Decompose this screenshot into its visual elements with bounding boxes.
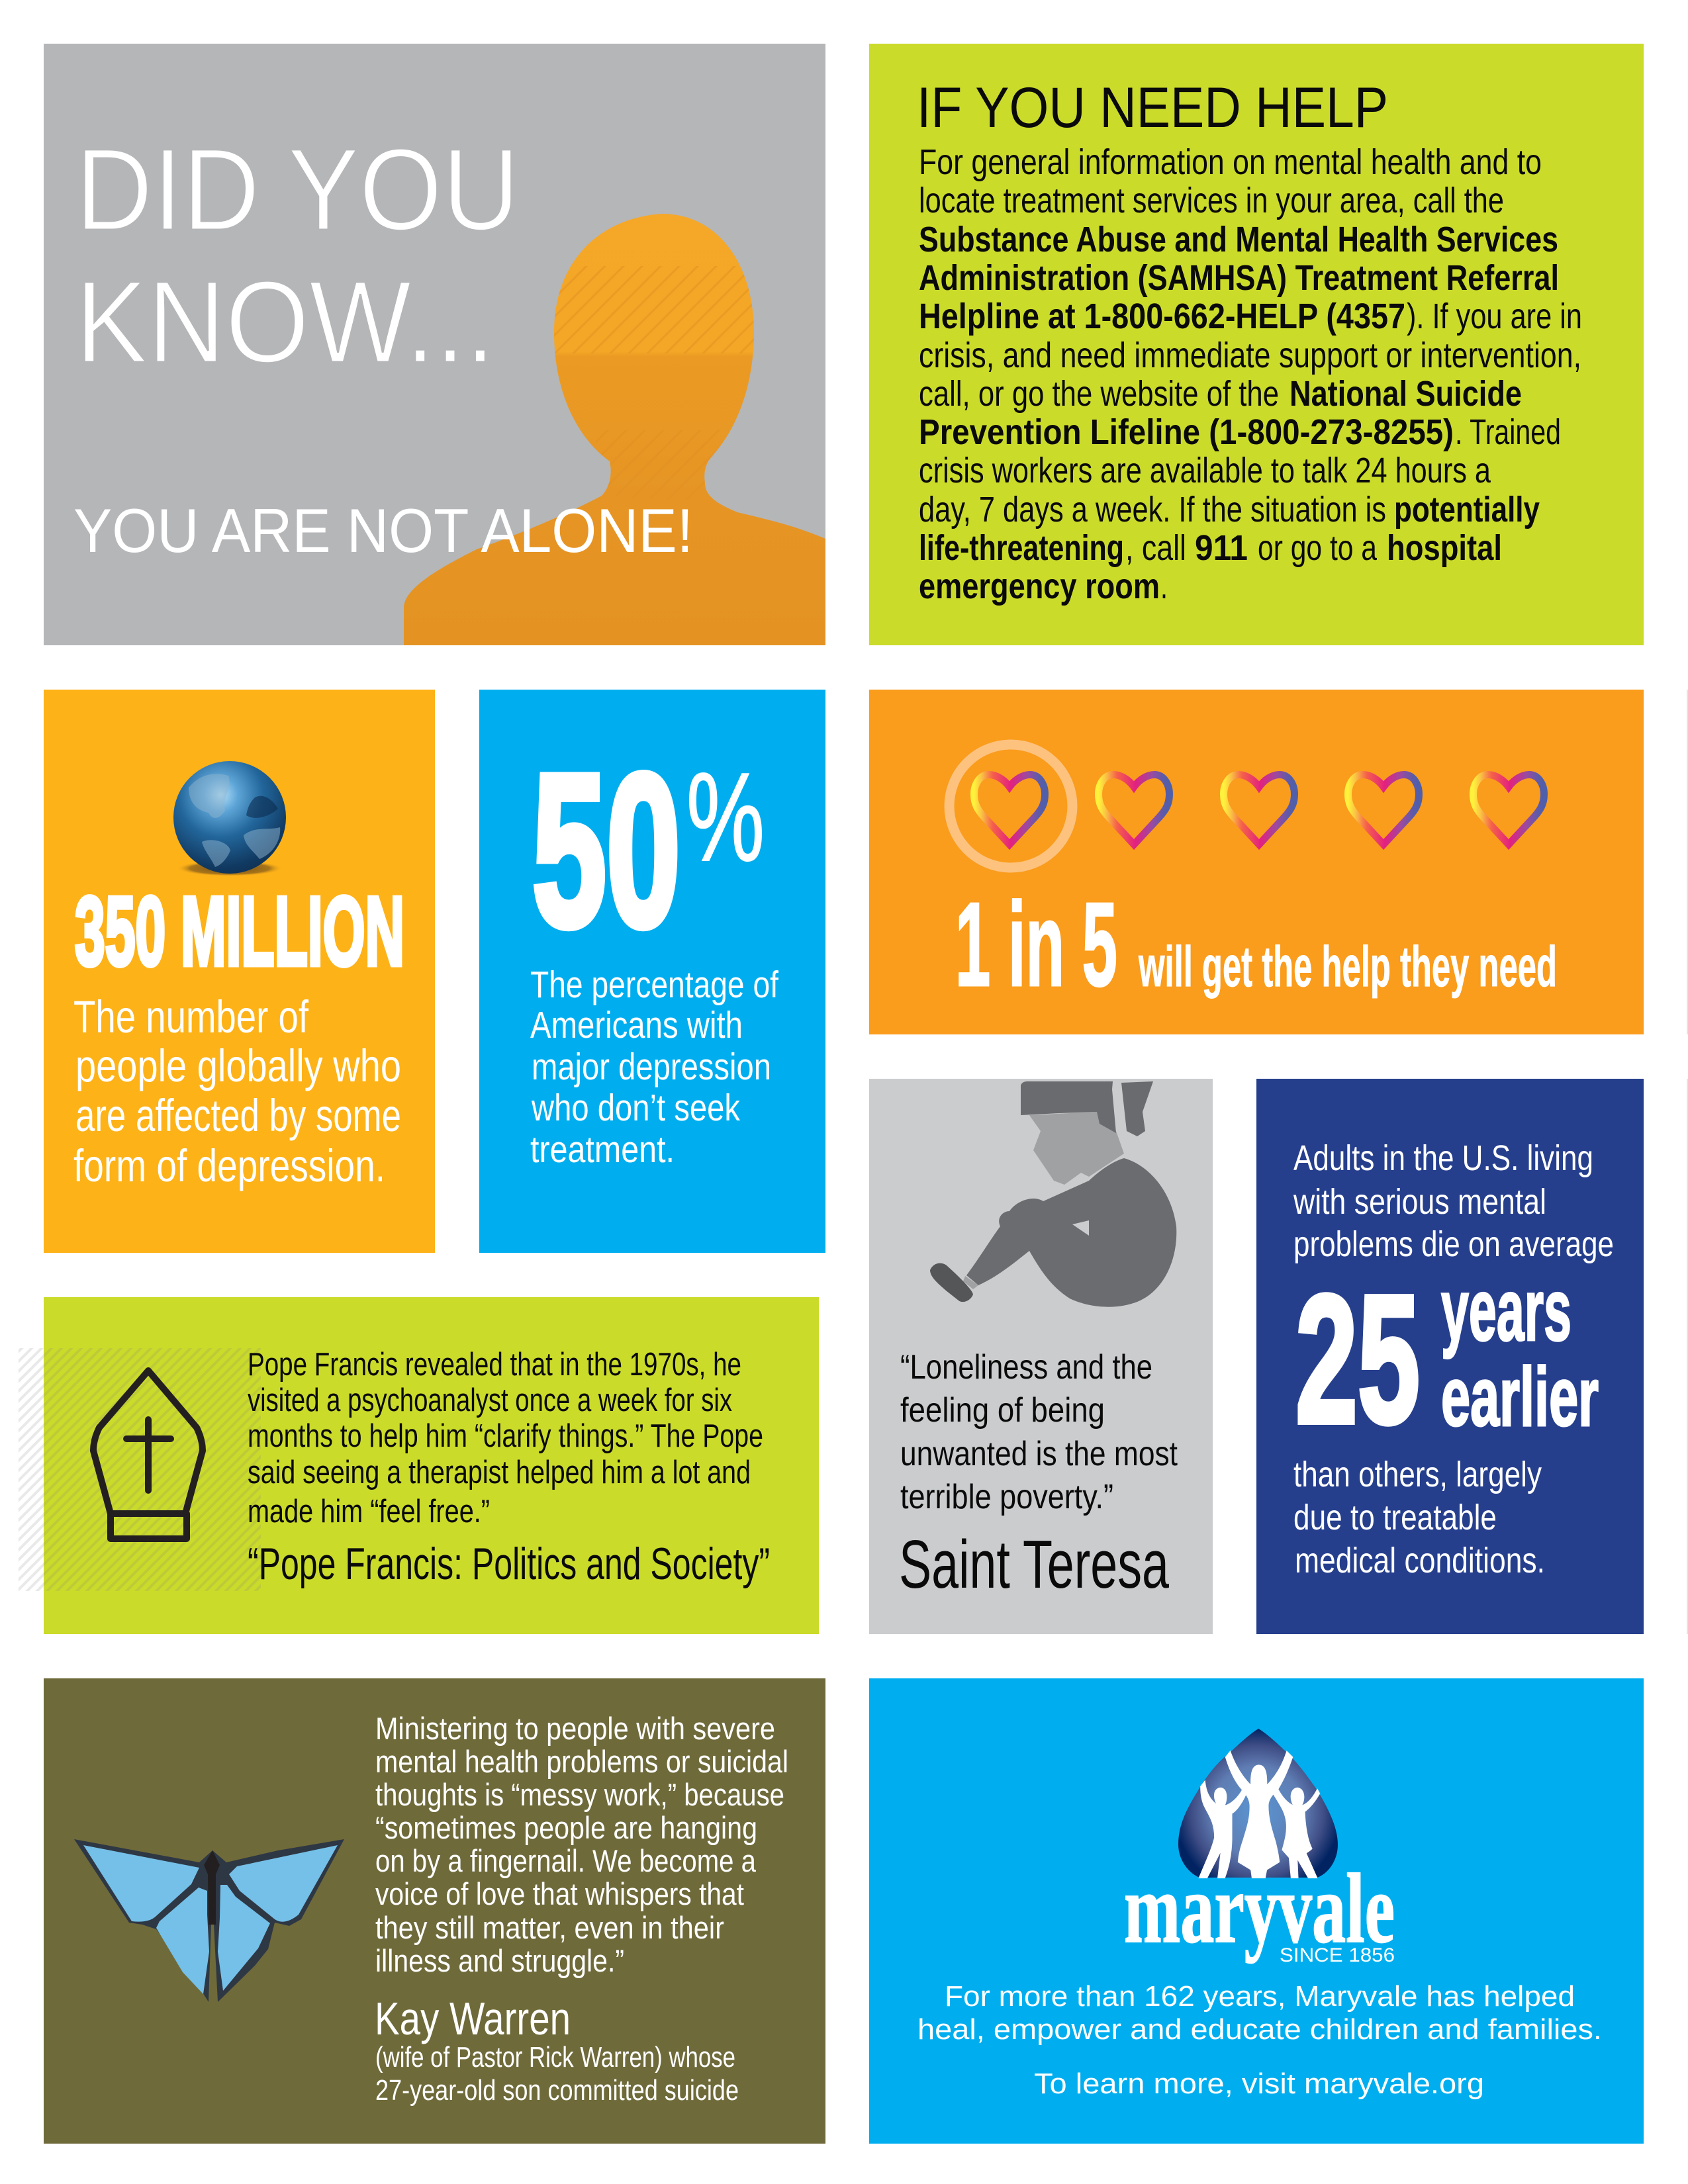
text block: major depression: who don’t seek — [531, 1087, 740, 1129]
text block: messy work quote: “sometimes people are hanging — [375, 1810, 757, 1845]
text block: treatable conditions: due to treatable — [1293, 1498, 1497, 1537]
caption: wife of pastor rick warren — [375, 2041, 739, 2107]
caption: wife of pastor rick warren: 27-year-old son committed suicide — [375, 2074, 739, 2107]
text block: help information: potentially — [1394, 490, 1540, 529]
panel: saint teresa quote — [869, 1079, 1213, 1634]
text block: major depression: The percentage of — [530, 964, 778, 1006]
heading: did you know: DID YOU — [75, 125, 520, 255]
icon: butterfly — [74, 1839, 344, 2002]
icon: seated woman — [930, 1081, 1176, 1307]
text block: pope francis account: months to help him “clarify things.” The Pope — [248, 1418, 763, 1454]
text block: help information: or go to a — [1258, 528, 1378, 568]
icon: papal mitre — [93, 1371, 203, 1539]
text block: loneliness quote: unwanted is the most — [900, 1435, 1178, 1473]
call to action: maryvale.org: To learn more, visit maryvale.org — [1034, 2068, 1484, 2100]
text block: help information: Prevention Lifeline (1-800-273-8255) — [919, 412, 1454, 452]
decorative hatch block — [19, 1348, 261, 1591]
text block: messy work quote — [375, 1711, 788, 1978]
heading: did you know — [75, 125, 520, 387]
panel: pope francis — [19, 1297, 819, 1634]
logo: maryvale family drop — [1178, 1729, 1338, 1878]
text block: global depression: The number of — [73, 991, 309, 1042]
text block: messy work quote: illness and struggle.” — [375, 1943, 624, 1978]
panel: 50 percent — [479, 690, 825, 1253]
text block: help information: National Suicide — [1289, 374, 1522, 414]
text block: help information: For general information on mental health and to — [919, 142, 1542, 182]
stat: 1 in 5: 1 in 5 — [955, 878, 1117, 1011]
text block: help information: Substance Abuse and Mental Health Services — [919, 220, 1558, 259]
text block: major depression: Americans with — [530, 1004, 743, 1046]
text block: loneliness quote: feeling of being — [900, 1391, 1105, 1430]
text block: maryvale mission: For more than 162 years, Maryvale has helped — [945, 1980, 1575, 2013]
text block: major depression — [530, 964, 778, 1171]
stat: 50 percent: 50 — [532, 729, 680, 972]
text block: messy work quote: mental health problems or suicidal — [375, 1744, 788, 1779]
attribution: saint teresa: Saint Teresa — [899, 1526, 1170, 1602]
text block: messy work quote: they still matter, even in their — [375, 1910, 724, 1945]
text block: global depression: form of depression. — [73, 1140, 385, 1191]
panel: 350 million — [44, 690, 435, 1253]
heading: if you need help: IF YOU NEED HELP — [917, 76, 1388, 140]
text block: maryvale mission — [917, 1980, 1602, 2046]
text block: help information: Administration (SAMHSA) Treatment Referral — [919, 258, 1559, 298]
stat: 25 years earlier — [1295, 1257, 1599, 1461]
text block: pope francis account: Pope Francis revealed that in the 1970s, he — [248, 1347, 741, 1383]
text block: adults with serious problems — [1293, 1138, 1614, 1264]
panel: 25 years earlier — [1256, 1079, 1644, 1634]
logo: maryvale wordmark: maryvale — [1124, 1854, 1395, 1964]
text block: global depression — [73, 991, 401, 1191]
text block: messy work quote: Ministering to people with severe — [375, 1711, 775, 1746]
text block: treatable conditions — [1293, 1455, 1545, 1580]
stat: 25 years earlier: years — [1441, 1261, 1571, 1359]
text block: messy work quote: on by a fingernail. We become a — [375, 1843, 757, 1878]
icon: globe — [173, 761, 286, 876]
text block: adults with serious problems: Adults in the U.S. living — [1293, 1138, 1593, 1178]
panel: if you need help — [869, 44, 1644, 645]
text block: major depression: treatment. — [530, 1128, 675, 1171]
text block: global depression: are affected by some — [75, 1090, 401, 1141]
panel: 1 in 5 — [869, 690, 1644, 1034]
attribution: kay warren: Kay Warren — [375, 1993, 571, 2044]
caption: wife of pastor rick warren: (wife of Pastor Rick Warren) whose — [375, 2041, 735, 2073]
text block: help information: hospital — [1387, 528, 1502, 568]
text block: loneliness quote: “Loneliness and the — [900, 1348, 1152, 1387]
text block: help information: day, 7 days a week. If the situation is — [919, 490, 1386, 529]
text block: help information: emergency room — [919, 567, 1160, 606]
text block: adults with serious problems: problems die on average — [1293, 1224, 1614, 1264]
text block: help information: . — [1160, 567, 1168, 606]
logo: since 1856: SINCE 1856 — [1280, 1944, 1395, 1966]
text block: treatable conditions: than others, largely — [1293, 1455, 1542, 1494]
text block: help information: ). If you are in — [1407, 296, 1582, 336]
icon: five hearts — [974, 774, 1544, 844]
stat: 50 percent: % — [686, 747, 765, 887]
text block: help information: life-threatening — [919, 528, 1124, 568]
text block: global depression: people globally who — [75, 1040, 401, 1091]
text block: messy work quote: thoughts is “messy work,” because — [375, 1777, 784, 1812]
text block: help information: 911 — [1195, 528, 1248, 568]
icon: highlight ring — [949, 745, 1072, 868]
text block: help information: crisis workers are available to talk 24 hours a — [919, 451, 1491, 490]
text block: messy work quote: voice of love that whispers that — [375, 1876, 744, 1911]
text block: loneliness quote: terrible poverty.” — [900, 1478, 1113, 1516]
text block: help information: call, or go the website of the — [919, 374, 1279, 414]
stat: 25 years earlier: earlier — [1441, 1350, 1599, 1443]
text block: help information: locate treatment services in your area, call the — [919, 181, 1504, 220]
panel: maryvale — [869, 1678, 1644, 2144]
text block: pope francis account: visited a psychoanalyst once a week for six — [248, 1383, 732, 1418]
text block: treatable conditions: medical conditions. — [1295, 1541, 1545, 1580]
text block: pope francis account: said seeing a therapist helped him a lot and — [248, 1455, 751, 1490]
text block: major depression: major depression — [532, 1046, 771, 1088]
text block: loneliness quote — [900, 1348, 1178, 1516]
stat: 350 million: 350 MILLION — [75, 877, 404, 986]
text block: pope francis account — [248, 1347, 763, 1529]
subheading: you are not alone: YOU ARE NOT ALONE! — [73, 496, 693, 565]
panel: did you know — [44, 44, 825, 645]
text block: maryvale mission: heal, empower and educate children and families. — [917, 2013, 1602, 2046]
text block: help information: Helpline at 1-800-662-HELP (4357 — [919, 296, 1405, 336]
text block: help information — [919, 142, 1582, 606]
text block: adults with serious problems: with serious mental — [1293, 1182, 1546, 1222]
text block: help information: , call — [1125, 528, 1186, 568]
heading: did you know: KNOW... — [75, 257, 495, 387]
text block: pope francis account: made him “feel free.” — [248, 1494, 490, 1529]
panel: kay warren — [44, 1678, 825, 2144]
icon: person silhouette — [404, 214, 825, 645]
stat: 25 years earlier: 25 — [1295, 1257, 1420, 1461]
source: politics and society: “Pope Francis: Politics and Society” — [248, 1539, 770, 1589]
text block: help information: . Trained — [1455, 412, 1561, 452]
